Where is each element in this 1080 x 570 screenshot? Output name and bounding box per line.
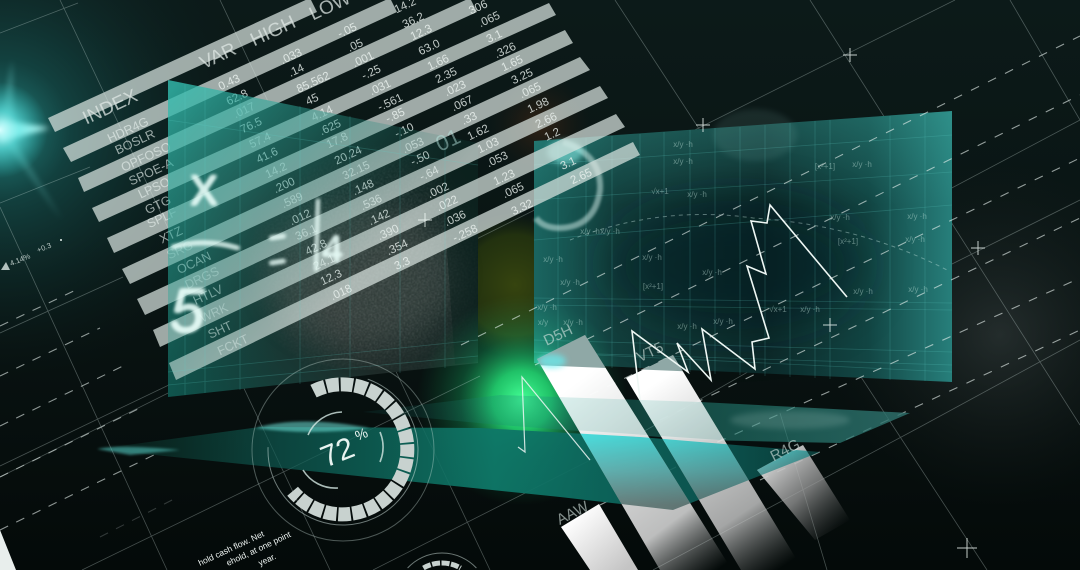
table values: 1.98 bbox=[526, 96, 551, 116]
table values: .536 bbox=[359, 193, 384, 213]
table header row: INDEX bbox=[79, 86, 141, 129]
table values: .200 bbox=[272, 176, 297, 196]
table values: -.10 bbox=[393, 121, 416, 141]
bar: AAW bbox=[561, 504, 638, 570]
table values: 1.66 bbox=[426, 53, 451, 73]
formula marks: x/y ·h bbox=[713, 317, 733, 326]
formula marks: x/y ·h bbox=[543, 255, 563, 264]
table row labels: SPLF bbox=[145, 205, 179, 231]
table row labels: SHT bbox=[206, 318, 235, 342]
gauge value bbox=[316, 424, 376, 474]
bar chart bbox=[537, 335, 850, 570]
table values: 12.3 bbox=[319, 268, 344, 288]
table values: 3.1 bbox=[485, 28, 504, 46]
table values: 45 bbox=[304, 92, 321, 108]
table values: 24.1 bbox=[312, 253, 337, 273]
formula marks: √x+1 bbox=[769, 305, 787, 314]
table values: .001 bbox=[351, 50, 376, 70]
bar labels: D5H bbox=[541, 321, 575, 349]
table values: 2.35 bbox=[434, 66, 459, 86]
bar tint layers bbox=[537, 335, 810, 510]
table values: .326 bbox=[493, 41, 518, 61]
fragment glyph on left panel: 01 bbox=[432, 124, 464, 157]
formula marks: x/y ·h bbox=[852, 160, 872, 169]
formula marks: x/y ·h bbox=[673, 140, 693, 149]
table values: 42.8 bbox=[304, 238, 329, 258]
panel: back floor plane bbox=[363, 395, 910, 443]
table values: .390 bbox=[376, 223, 401, 243]
table values: .012 bbox=[288, 208, 313, 228]
table values: .065 bbox=[477, 10, 502, 30]
formula marks: x/y ·h bbox=[580, 227, 600, 236]
table row labels: HTLV bbox=[191, 282, 226, 308]
table values: 0.43 bbox=[217, 73, 242, 93]
line chart bbox=[518, 205, 847, 460]
table values: .053 bbox=[485, 150, 510, 170]
formula marks: x/y ·h bbox=[830, 213, 850, 222]
table row labels bbox=[105, 114, 251, 358]
faint disc bbox=[713, 109, 797, 161]
dashed lines right bbox=[461, 36, 1080, 505]
formula marks: x/y ·h bbox=[687, 190, 707, 199]
bar labels: R4G bbox=[768, 436, 803, 465]
table values: -.05 bbox=[336, 21, 359, 41]
table row labels: OCAN bbox=[175, 249, 213, 277]
HUD readout left: +0.3 bbox=[36, 241, 53, 255]
handwritten math glyphs: 4 bbox=[322, 229, 343, 271]
formula marks: x/y ·h bbox=[800, 305, 820, 314]
table values: .018 bbox=[329, 283, 354, 303]
table header row: VAR bbox=[197, 39, 240, 74]
left flare bbox=[0, 60, 62, 220]
formula marks bbox=[537, 140, 928, 331]
formula marks: x/y ·h bbox=[642, 253, 662, 262]
bar labels: VT5 bbox=[634, 339, 666, 366]
table values: 20.24 bbox=[333, 144, 365, 167]
table values: .067 bbox=[450, 94, 475, 114]
table values: 17.8 bbox=[325, 131, 350, 151]
table values: 85.562 bbox=[295, 70, 332, 96]
table values: 1.2 bbox=[543, 126, 562, 144]
corner bar fragment bbox=[0, 530, 16, 570]
table values: .065 bbox=[501, 181, 526, 201]
table values: .023 bbox=[443, 79, 468, 99]
HUD readout left bbox=[1, 239, 62, 270]
table values: 63.0 bbox=[417, 38, 442, 58]
table stripes bbox=[48, 0, 640, 380]
table values: 36.1 bbox=[294, 223, 319, 243]
bar labels: AAW bbox=[554, 498, 592, 529]
table values: 1.03 bbox=[476, 136, 501, 156]
table values: .142 bbox=[367, 208, 392, 228]
screen grid bbox=[168, 84, 478, 395]
bar: D5H bbox=[537, 335, 732, 570]
segmented progress ring bbox=[293, 384, 407, 514]
table values: 3.32 bbox=[510, 198, 535, 218]
table row labels: FCKT bbox=[215, 332, 251, 358]
screen grid bbox=[534, 113, 952, 381]
table header row: HIGH bbox=[247, 12, 299, 51]
table values: 2.65 bbox=[569, 167, 594, 187]
table values: 36.2 bbox=[401, 11, 426, 31]
table values: .031 bbox=[368, 78, 393, 98]
bar: VT5 bbox=[626, 355, 803, 570]
bar labels bbox=[541, 321, 803, 529]
table row labels: HDR4G bbox=[105, 114, 151, 146]
table row labels: GTG bbox=[143, 193, 173, 217]
gauge value: 72 bbox=[316, 431, 359, 474]
table values: 3.25 bbox=[510, 67, 535, 87]
table row labels: WRK bbox=[198, 300, 231, 326]
table values: 57.4 bbox=[248, 130, 274, 151]
table values: -.85 bbox=[384, 106, 407, 126]
table values: -.64 bbox=[418, 164, 441, 184]
table values: .002 bbox=[426, 181, 451, 201]
table values: 32.15 bbox=[341, 159, 372, 182]
table values: 1.23 bbox=[492, 168, 517, 188]
handwritten math glyphs: x bbox=[190, 154, 218, 217]
table values: .589 bbox=[280, 191, 305, 211]
body text fragment: year. bbox=[257, 551, 278, 568]
formula marks: x/y ·h bbox=[908, 285, 928, 294]
glowing ring glyph bbox=[536, 142, 600, 228]
formula marks: [x²+1] bbox=[815, 162, 835, 171]
table values: .05 bbox=[346, 37, 365, 55]
table values bbox=[217, 0, 594, 303]
formula marks: x/y ·h bbox=[907, 212, 927, 221]
formula marks: x/y bbox=[538, 318, 548, 327]
table row labels: SRG bbox=[165, 238, 195, 262]
handwritten math glyphs bbox=[170, 154, 343, 346]
table values: .022 bbox=[435, 194, 460, 214]
table values: 1.62 bbox=[466, 123, 491, 143]
lower gauge partial bbox=[408, 553, 476, 568]
gauge: 72 percent bbox=[247, 354, 439, 546]
table values: .065 bbox=[518, 81, 543, 101]
formula marks: x/y ·h bbox=[677, 322, 697, 331]
table values: 76.5 bbox=[239, 116, 264, 136]
handwritten math glyphs: 5 bbox=[170, 277, 205, 346]
table row labels: LPSO bbox=[136, 174, 172, 201]
table values: 12.3 bbox=[409, 23, 434, 43]
panel: left math screen base bbox=[168, 80, 478, 397]
table values: .354 bbox=[385, 237, 411, 258]
body text fragment: ehold, at one point bbox=[225, 529, 293, 568]
table values: 62.8 bbox=[225, 88, 250, 108]
panel: main floor plane bbox=[97, 422, 820, 510]
table values: .625 bbox=[318, 118, 343, 138]
formula marks: x/y ·h bbox=[673, 157, 693, 166]
table values: 3.3 bbox=[393, 255, 412, 273]
table values: 1.65 bbox=[500, 54, 525, 74]
cyan highlight on bar top bbox=[538, 354, 566, 368]
table values: -.258 bbox=[451, 223, 480, 245]
table row labels: SPOE-A bbox=[127, 155, 176, 188]
table values: 41.6 bbox=[255, 146, 280, 166]
inner arcs bbox=[303, 412, 383, 488]
table values: -.50 bbox=[409, 149, 432, 169]
formula marks: [x²+1] bbox=[643, 282, 663, 291]
formula marks: [x²+1] bbox=[838, 237, 858, 246]
table row labels: BOSLR bbox=[113, 127, 157, 157]
HUD readout left: 4.14% bbox=[9, 251, 32, 268]
panel: left screen teal overlay bbox=[168, 80, 478, 397]
crosshair marks bbox=[418, 48, 985, 558]
table values: .33 bbox=[460, 110, 479, 128]
dashed lines left bbox=[0, 288, 178, 537]
gauge value: % bbox=[353, 424, 370, 444]
table row labels: OPFOSO bbox=[119, 139, 173, 175]
formula marks: x/y ·h bbox=[560, 278, 580, 287]
table header row bbox=[79, 0, 354, 129]
dashed arc bbox=[570, 214, 947, 270]
formula marks: √x+1 bbox=[651, 187, 669, 196]
table values: .033 bbox=[279, 47, 304, 67]
table values: .14 bbox=[287, 62, 307, 80]
formula marks: x/y ·h bbox=[563, 318, 583, 327]
table values: 14.2 bbox=[264, 161, 289, 181]
formula marks: x/y ·h bbox=[600, 227, 620, 236]
formula marks: x/y ·h bbox=[905, 235, 925, 244]
table values: 2.66 bbox=[534, 111, 559, 131]
table values: 3.1 bbox=[559, 155, 578, 173]
table row labels: DRGS bbox=[183, 264, 221, 292]
table values: -.25 bbox=[360, 63, 383, 83]
table row labels: XTZ bbox=[157, 224, 185, 246]
green lens flare bbox=[417, 295, 627, 505]
table values: -.561 bbox=[376, 92, 405, 114]
formula marks: x/y ·h bbox=[537, 303, 557, 312]
panel: right chart screen bbox=[534, 109, 952, 382]
table values: .017 bbox=[232, 101, 257, 121]
formula marks: x/y ·h bbox=[853, 287, 873, 296]
table values: .148 bbox=[351, 178, 376, 198]
table values: .053 bbox=[401, 136, 426, 156]
formula marks: x/y ·h bbox=[702, 268, 722, 277]
body text fragment: hold cash flow. Net bbox=[197, 528, 266, 568]
bar: R4G bbox=[757, 445, 850, 540]
table values: 4.14 bbox=[310, 103, 336, 124]
table values: .036 bbox=[443, 209, 468, 229]
